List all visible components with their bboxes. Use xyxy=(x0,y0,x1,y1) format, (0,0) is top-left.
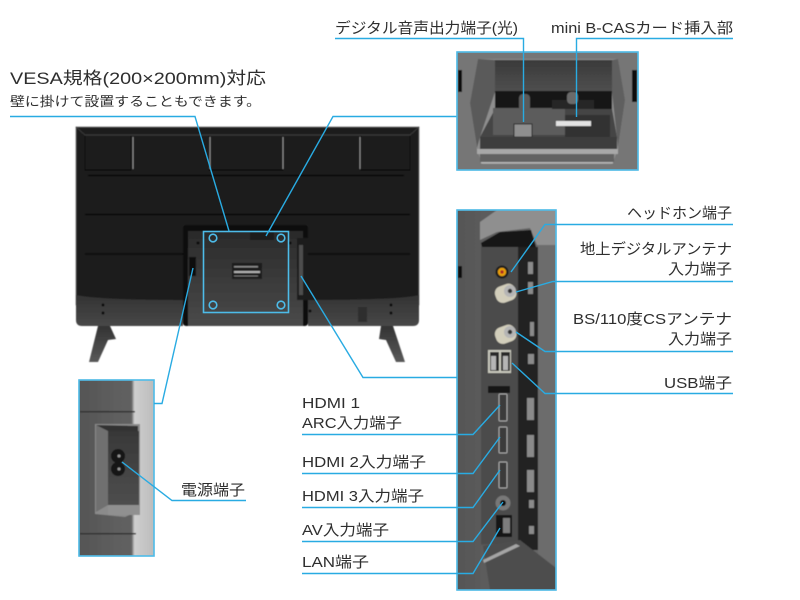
label: mini B-CAS: mini B-CASカード挿入部 xyxy=(551,20,733,37)
label: AV xyxy=(302,502,503,542)
centre recess xyxy=(183,225,308,326)
label: optical audio: デジタル音声出力端子(光) xyxy=(335,19,518,37)
label: LAN: LAN端子 xyxy=(302,554,369,571)
heading: VESA: 壁に掛けて設置することもできます。 xyxy=(10,94,261,109)
label sticker xyxy=(232,263,262,279)
label: BS/CS antenna: BS/110度CSアンテナ xyxy=(573,311,732,328)
label: HDMI 3 xyxy=(302,470,500,508)
leader: VESA xyxy=(10,116,229,231)
label: USB xyxy=(512,363,733,394)
label: HDMI 1: HDMI 1 xyxy=(302,395,360,412)
PCB labels xyxy=(527,262,534,534)
leader: top slot photo xyxy=(266,116,457,236)
heading: VESA xyxy=(10,69,266,109)
TV rear view xyxy=(76,127,419,362)
label: AV: AV入力端子 xyxy=(302,522,389,539)
headphone jack xyxy=(496,266,508,278)
photo: side terminal panel xyxy=(457,210,556,590)
leader: rear terminals xyxy=(301,276,457,378)
label: terrestrial antenna: 地上デジタルアンテナ xyxy=(580,240,732,258)
AV jack xyxy=(496,496,510,510)
label: USB: USB端子 xyxy=(664,375,732,392)
label: headphone xyxy=(511,205,733,272)
label: terrestrial antenna: 入力端子 xyxy=(668,261,732,278)
heading: VESA: VESA規格(200×200mm)対応 xyxy=(10,69,266,88)
photo: power terminal xyxy=(79,380,154,556)
left stand leg xyxy=(89,326,116,362)
label: BS/CS antenna xyxy=(516,311,733,352)
USB ports xyxy=(488,350,511,373)
label: BS/CS antenna: 入力端子 xyxy=(668,331,732,348)
label: LAN xyxy=(302,528,500,574)
label: HDMI 2: HDMI 2入力端子 xyxy=(302,454,426,471)
label: power: 電源端子 xyxy=(181,482,245,499)
label: HDMI 3: HDMI 3入力端子 xyxy=(302,488,424,505)
antenna connectors xyxy=(493,282,518,305)
label: power xyxy=(122,462,246,500)
label: terrestrial antenna xyxy=(516,240,733,292)
VESA mount highlight xyxy=(204,232,288,312)
leader: power photo xyxy=(154,268,193,404)
label: mini B-CAS xyxy=(551,20,733,117)
label: HDMI 1: ARC入力端子 xyxy=(302,415,402,432)
screw dots xyxy=(102,242,392,314)
HDMI ports xyxy=(499,394,507,421)
label: optical audio xyxy=(335,19,524,122)
label: HDMI 2 xyxy=(302,437,500,474)
right stand leg xyxy=(379,326,405,362)
photo: top card slot panel xyxy=(457,52,638,170)
bottom bar xyxy=(76,295,419,326)
LAN port xyxy=(496,515,512,537)
TV back panel xyxy=(76,127,419,305)
label: HDMI 1 xyxy=(302,395,500,434)
label: headphone: ヘッドホン端子 xyxy=(627,205,732,222)
